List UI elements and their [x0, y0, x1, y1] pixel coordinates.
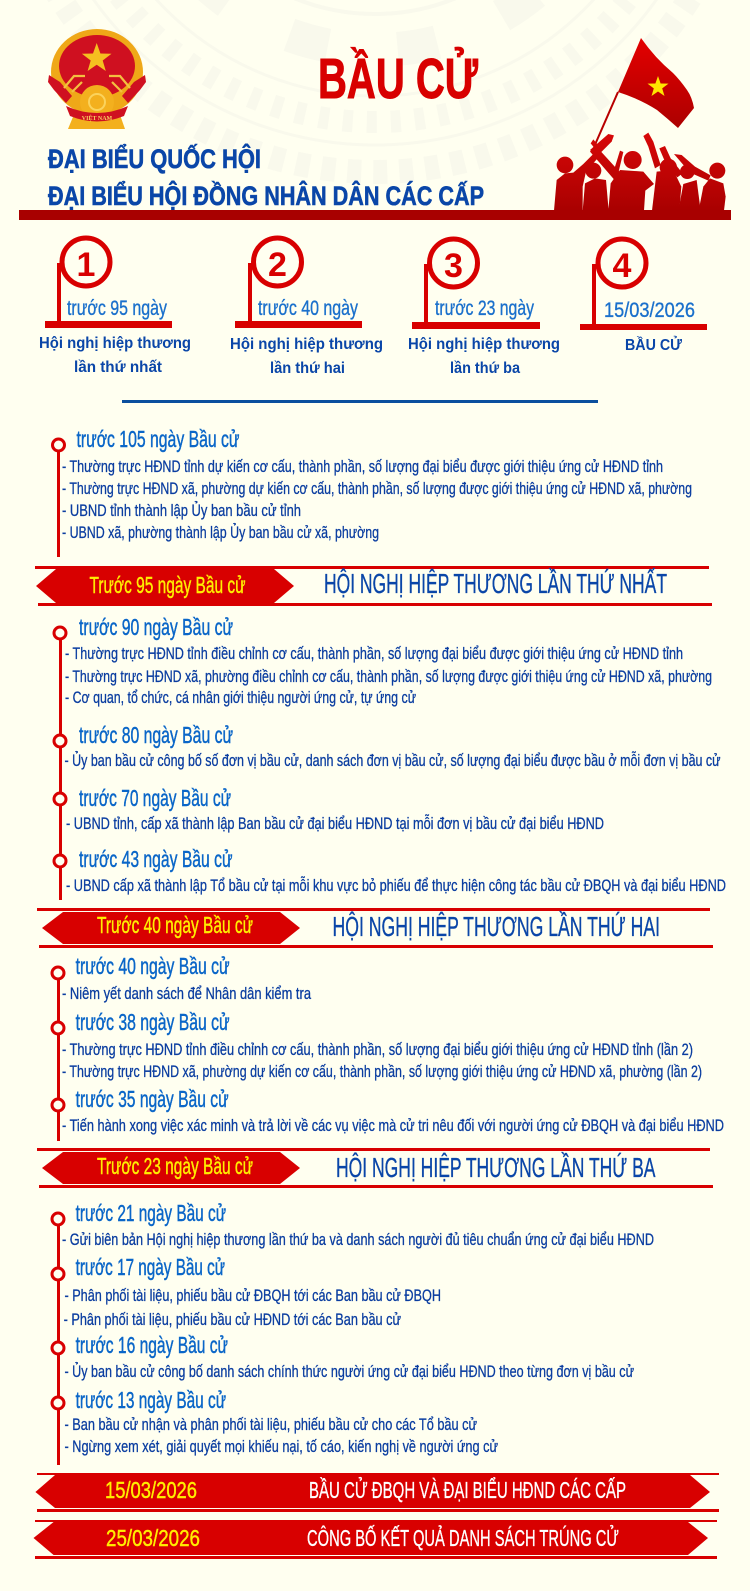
banner: before 23 days: Trước 23 ngày Bầu cử [97, 1153, 253, 1179]
event: before 13 days [52, 1387, 498, 1456]
event: before 70 days [54, 785, 604, 833]
banner: results announcement: 25/03/2026 [106, 1525, 200, 1551]
banner: results announcement [34, 1520, 717, 1559]
banner: before 95 days [35, 566, 712, 606]
step 3: trước 23 ngày [435, 297, 534, 320]
header bar [19, 210, 731, 220]
heading: subtitle [48, 142, 484, 211]
icon: flag and crowd [554, 38, 726, 211]
event: before 17 days: trước 17 ngày Bầu cử [76, 1254, 225, 1280]
banner: before 40 days [37, 908, 713, 948]
step 2: trước 40 ngày [258, 297, 358, 320]
icon: national emblem: VIỆT NAM [82, 114, 113, 122]
timeline: before 105 days: - UBND tỉnh thành lập Ủy ban bầu cử tỉnh [62, 501, 301, 520]
event: before 16 days: trước 16 ngày Bầu cử [76, 1332, 228, 1358]
timeline: before 40 to 35 days [52, 953, 724, 1141]
banner: election day [35, 1473, 719, 1512]
step 4 [580, 239, 707, 354]
step 1 [39, 238, 191, 376]
banner: before 40 days: Trước 40 ngày Bầu cử [97, 912, 253, 938]
event: before 16 days [52, 1332, 634, 1381]
timeline: before 90 to 43 days [54, 614, 726, 900]
step 3: Hội nghị hiệp thương [408, 336, 560, 353]
timeline: before 105 days: trước 105 ngày Bầu cử [76, 426, 240, 452]
heading: subtitle: ĐẠI BIỂU HỘI ĐỒNG NHÂN DÂN CÁC CẤP [48, 180, 484, 211]
step 3: lần thứ ba [450, 360, 520, 377]
event: before 17 days [52, 1254, 441, 1329]
event: before 35 days: trước 35 ngày Bầu cử [76, 1086, 229, 1112]
event: before 21 days [52, 1200, 654, 1249]
timeline: before 21 to 13 days [52, 1200, 654, 1465]
event: before 13 days: - Ban bầu cử nhận và phân phối tài liệu, phiếu bầu cử cho các Tổ bầu cử [64, 1415, 477, 1434]
event: before 40 days: - Niêm yết danh sách để Nhân dân kiểm tra [62, 984, 311, 1003]
title: BẦU CỬ [318, 46, 478, 111]
banner: before 23 days [37, 1148, 713, 1188]
step 1: Hội nghị hiệp thương [39, 335, 191, 352]
event: before 90 days: trước 90 ngày Bầu cử [79, 614, 233, 640]
event: before 90 days [54, 614, 712, 707]
step 2: Hội nghị hiệp thương [230, 336, 383, 353]
event: before 80 days: trước 80 ngày Bầu cử [79, 722, 233, 748]
event: before 80 days [54, 722, 720, 770]
step 1: 1 [77, 246, 95, 284]
event: before 35 days [52, 1086, 724, 1135]
step 2: 2 [268, 246, 287, 284]
event: before 13 days: - Ngừng xem xét, giải quyết mọi khiếu nại, tố cáo, kiến nghị về người ứng cử [64, 1437, 498, 1456]
event: before 17 days: - Phân phối tài liệu, phiếu bầu cử HĐND tới các Ban bầu cử [64, 1310, 401, 1329]
timeline: before 105 days: - UBND xã, phường thành lập Ủy ban bầu cử xã, phường [62, 523, 379, 542]
banner: before 95 days: Trước 95 ngày Bầu cử [90, 572, 246, 598]
event: before 90 days: - Cơ quan, tổ chức, cá nhân giới thiệu người ứng cử, tự ứng cử [65, 688, 416, 707]
event: before 13 days: trước 13 ngày Bầu cử [76, 1387, 226, 1413]
event: before 40 days [52, 953, 311, 1003]
timeline: before 105 days [52, 426, 692, 557]
heading: subtitle: ĐẠI BIỂU QUỐC HỘI [48, 142, 261, 174]
step 2 [230, 238, 383, 377]
icon: national emblem [48, 29, 146, 129]
step 1: trước 95 ngày [67, 297, 167, 320]
event: before 70 days: trước 70 ngày Bầu cử [79, 785, 231, 811]
event: before 21 days: trước 21 ngày Bầu cử [76, 1200, 226, 1226]
event: before 17 days: - Phân phối tài liệu, phiếu bầu cử ĐBQH tới các Ban bầu cử ĐBQH [64, 1286, 441, 1305]
event: before 43 days: trước 43 ngày Bầu cử [79, 846, 232, 872]
event: before 38 days: trước 38 ngày Bầu cử [76, 1009, 230, 1035]
step 4: 15/03/2026 [604, 299, 695, 322]
step 4: 4 [613, 247, 632, 285]
step 1: lần thứ nhất [74, 359, 163, 376]
event: before 38 days [52, 1009, 702, 1081]
step 3: 3 [444, 247, 463, 285]
step 4: BẦU CỬ [625, 335, 683, 354]
event: before 43 days [54, 846, 726, 895]
event: before 40 days: trước 40 ngày Bầu cử [76, 953, 230, 979]
step 2: lần thứ hai [270, 360, 345, 377]
banner: election day: 15/03/2026 [105, 1477, 197, 1503]
step 3 [408, 239, 560, 377]
